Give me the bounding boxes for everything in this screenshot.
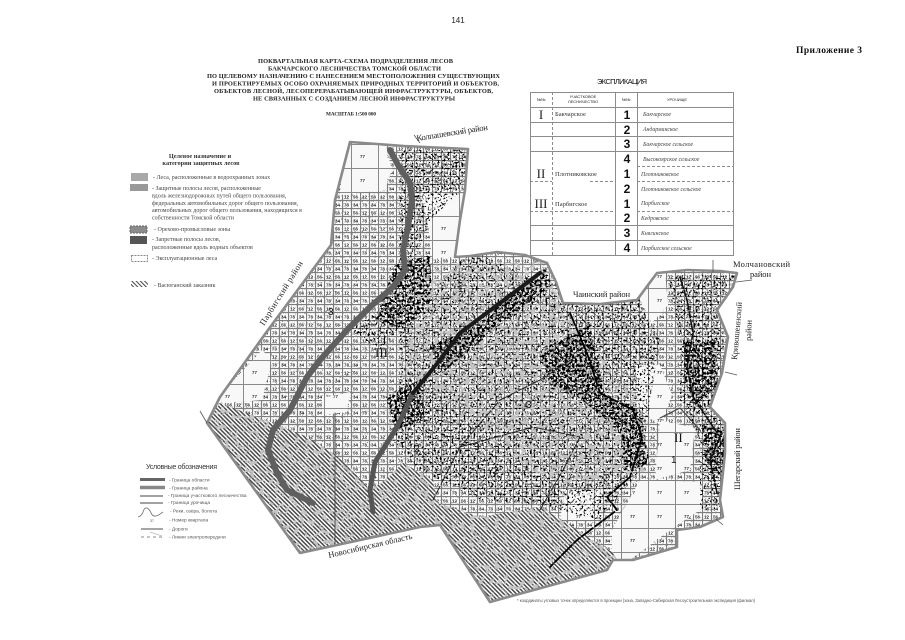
footnote: * координаты угловых точек определяются в проекции (зона, Западно-Сибирская Лесоустроительная экспедиция (филиал) [517, 598, 756, 603]
explication table: Плотниковское [555, 171, 597, 178]
legend: forest purpose: категории защитных лесов [162, 160, 240, 167]
explication table: 3 [624, 226, 631, 240]
legend: forest purpose: Целевое назначение и [169, 153, 232, 160]
title: МАСШТАБ 1:500 000 [326, 112, 376, 118]
explication table: Бакчарское [642, 112, 671, 118]
dark stippled zones [375, 255, 725, 480]
legend: forest purpose [130, 153, 302, 289]
swatch: water protection zones [131, 173, 148, 181]
explication heading: ЭКСПЛИКАЦИЯ [597, 77, 647, 86]
neighbouring district labels: Кривошеинский [729, 301, 744, 360]
fine stipple over whole forest [214, 146, 734, 559]
swatch: nut zones [130, 226, 147, 233]
legend: forest purpose: - Эксплуатационные леса [152, 256, 217, 262]
explication table: 1 [624, 197, 631, 211]
legend: forest purpose: - Защитные полосы лесов, расположенные [152, 186, 261, 192]
explication table: Плотниковское [640, 172, 679, 178]
neighbouring district labels: Парбигский район [257, 259, 305, 327]
explication table: Бакчарское [555, 111, 586, 118]
legend: forest purpose: собственности Томской области [152, 214, 235, 222]
forest numbers on the map: 2 [689, 395, 695, 406]
legend: forest purpose: вдоль железнодорожных путей общего пользования, [152, 192, 287, 200]
explication table: III [534, 196, 548, 211]
explication table: 1 [624, 108, 631, 122]
neighbouring district labels: Чаинский район [573, 289, 630, 299]
speckled compartments, moderate density [350, 150, 735, 520]
explication table: 1 [624, 167, 631, 181]
legend: map symbols: - Реки, озёра, болота [170, 508, 217, 514]
legend: forest purpose: автомобильных дорог общего пользования, находящихся в [152, 207, 302, 214]
river network and forest strips [268, 150, 720, 567]
legend: map symbols: - Граница урочища [168, 500, 210, 506]
legend: map symbols: - Линии электропередачи [169, 534, 226, 540]
title: ПО ЦЕЛЕВОМУ НАЗНАЧЕНИЮ С НАНЕСЕНИЕМ МЕСТОПОЛОЖЕНИЯ СУЩЕСТВУЮЩИХ [207, 73, 500, 80]
eastern rivers [550, 313, 642, 567]
leader ticks [200, 135, 752, 525]
explication table: 2 [624, 211, 631, 225]
legend: map symbols: Условные обозначения [146, 463, 217, 471]
legend: forest purpose: - Васюганский заказник [154, 282, 215, 289]
title [207, 58, 500, 118]
swatch: restricted strips [130, 236, 147, 244]
map [200, 135, 752, 610]
legend: map symbols: - Номер квартала [169, 518, 208, 524]
neighbouring district labels [257, 122, 790, 560]
explication table: Высокоярское сельское [643, 157, 700, 163]
forest numbers on the map: 1 [671, 455, 677, 466]
forest numbers on the map: 3 [526, 400, 532, 411]
map outline [207, 142, 737, 602]
forest numbers on the map: 3 [474, 442, 480, 453]
forest numbers on the map: 2 [414, 444, 420, 455]
forest numbers on the map [328, 260, 695, 494]
forest numbers on the map: 4 [407, 260, 413, 271]
hatched reserve [207, 403, 620, 610]
explication table: Парбигское сельское [640, 245, 692, 252]
forest numbers on the map: 1 [583, 451, 589, 462]
explication table: Парбигское [555, 201, 587, 208]
forest numbers on the map: 3 [328, 307, 334, 318]
legend: forest purpose: федеральных автомобильных дорог общего пользования, [152, 200, 299, 207]
explication table: 3 [624, 137, 631, 151]
title: БАКЧАРСКОГО ЛЕСНИЧЕСТВА ТОМСКОЙ ОБЛАСТИ [268, 64, 441, 72]
title: И ПРОЕКТИРУЕМЫХ ОСОБО ОХРАНЯЕМЫХ ПРИРОДНЫХ ТЕРРИТОРИЙ И ОБЪЕКТОВ, [212, 80, 499, 88]
swatch: protective strips [130, 184, 148, 191]
appendix label: Приложение 3 [796, 46, 862, 56]
explication table: 2 [624, 182, 631, 196]
neighbouring district labels: Шегарский район [732, 428, 742, 490]
explication table: УРОЧИЩЕ [667, 97, 687, 102]
legend: map symbols: - Граница области [169, 478, 210, 484]
legend: forest purpose: - Леса, расположенные в водоохранных зонах [153, 175, 270, 181]
neighbouring district labels: район [750, 269, 771, 279]
explication table: I [539, 107, 543, 122]
forest numbers on the map: 4 [525, 295, 531, 306]
legend: map symbols: 37 [150, 519, 154, 523]
explication table: 4 [624, 241, 631, 255]
legend: forest purpose: расположенные вдоль водных объектов [152, 244, 253, 251]
title: НЕ СВЯЗАННЫХ С СОЗДАНИЕМ ЛЕСНОЙ ИНФРАСТРУКТУРЫ [253, 94, 456, 102]
legend: forest purpose: - Запретные полосы лесов, [152, 237, 221, 243]
west protective strip [268, 150, 412, 503]
gray stipple zones [400, 262, 650, 490]
title: ОБЪЕКТОВ ЛЕСНОЙ, ЛЕСОПЕРЕРАБАТЫВАЮЩЕЙ ИНФРАСТРУКТУРЫ, ОБЪЕКТОВ, [214, 87, 493, 95]
explication table: Плотниковское сельское [640, 187, 702, 193]
map: III [375, 345, 388, 360]
explication table [530, 92, 734, 256]
explication table: №№ [622, 97, 630, 102]
explication table: УЧАСТКОВОЕ [570, 94, 597, 99]
explication table: 2 [624, 123, 631, 137]
forest numbers on the map: 4 [457, 350, 463, 361]
explication table: ЛЕСНИЧЕСТВО [568, 99, 598, 104]
neighbouring district labels: Колпашевский район [416, 122, 489, 143]
sparse forest areas [215, 140, 705, 560]
legend: map symbols [138, 463, 247, 540]
explication table: Парбигское [640, 200, 670, 207]
gray patches in reserve [207, 403, 620, 610]
explication table: II [537, 166, 545, 181]
explication table: Андарминское [642, 126, 678, 133]
explication table: Кедровское [640, 215, 669, 222]
neighbouring district labels: район [743, 319, 754, 341]
forest numbers on the map: 1 [458, 284, 464, 295]
explication table: Бакчарское сельское [642, 142, 694, 148]
forest numbers on the map: 1 [585, 483, 591, 494]
legend: forest purpose: - Орехово-промысловые зоны [154, 227, 230, 233]
neighbouring district labels: Новосибирская область [327, 531, 413, 560]
map: II [674, 430, 683, 445]
legend: map symbols: - Граница участкового лесничества [168, 493, 247, 499]
neighbouring district labels: Молчановский [733, 259, 790, 269]
base quarter grid [213, 146, 735, 558]
legend: map symbols: - Граница района [169, 484, 208, 492]
forest numbers on the map: 2 [493, 466, 499, 477]
page number: 141 [451, 16, 465, 25]
central protective strip [370, 393, 413, 512]
swatch: reserve [131, 281, 148, 287]
legend: map symbols: - Дороги [169, 526, 188, 532]
explication table: №№ [537, 97, 545, 102]
swatch: production forests [132, 256, 148, 262]
explication table: Княгинское [640, 231, 669, 237]
symbols [138, 480, 165, 537]
explication table: 4 [624, 152, 631, 166]
title: ПОКВАРТАЛЬНАЯ КАРТА-СХЕМА ПОДРАЗДЕЛЕНИЯ ЛЕСОВ [258, 58, 454, 65]
